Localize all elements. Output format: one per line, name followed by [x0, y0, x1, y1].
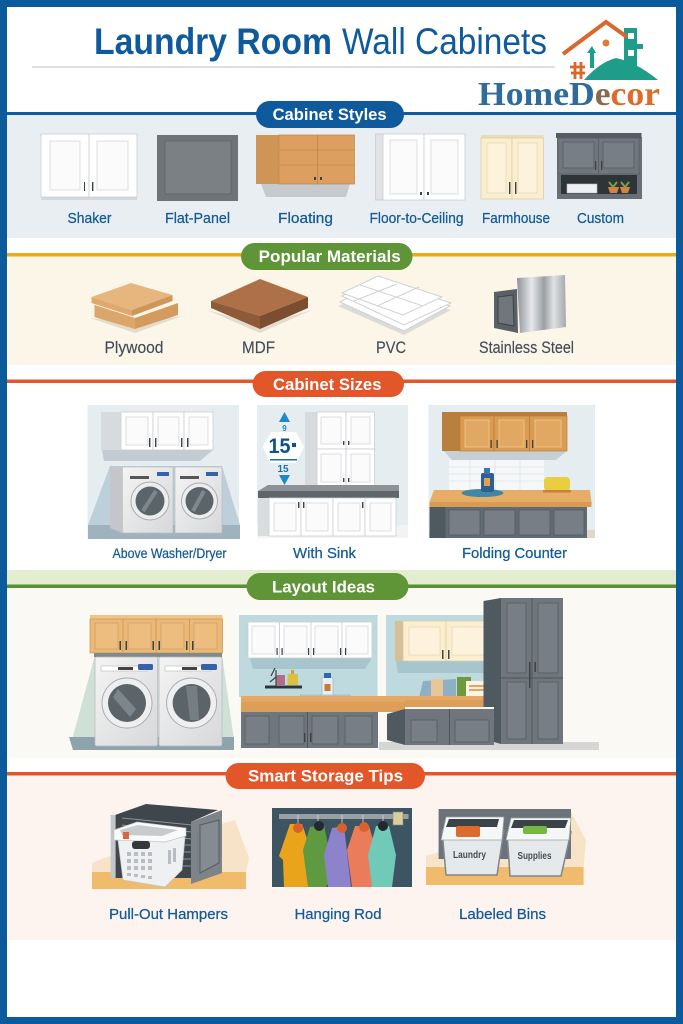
illustration: pull-out hamper: [92, 804, 249, 889]
heading: Cabinet Styles: [256, 101, 404, 128]
illustration: counter and base cabinets: [241, 615, 599, 750]
heading: Popular Materials: Popular Materials: [259, 247, 401, 266]
bin: supplies: Supplies: [518, 851, 552, 862]
labels: style names: Shaker: [68, 210, 112, 227]
labels: material names: Plywood: [104, 338, 164, 357]
illustration: tall cabinet: [484, 598, 563, 744]
panel: cabinet sizes: [7, 371, 676, 562]
logo: HomeDecor: HomeDecor: [478, 76, 660, 113]
icon: house: [563, 22, 658, 80]
callout: size dimension: 9: [282, 424, 287, 433]
labels: size names: With Sink: [293, 545, 356, 562]
cabinet: floating: [256, 135, 354, 197]
panel: smart storage tips: [7, 763, 676, 940]
illustration: sink wall and counter: [239, 615, 378, 702]
labels: material names: [104, 338, 574, 357]
material: PVC: [338, 276, 451, 335]
heading: Layout Ideas: Layout Ideas: [272, 578, 375, 597]
illustration: above washer/dryer: [88, 405, 240, 539]
logo: HomeDecor: [478, 22, 660, 113]
callout: size dimension: 15: [277, 464, 289, 475]
labels: material names: MDF: [242, 338, 275, 357]
illustration: washer and dryer wall: [69, 615, 234, 750]
material: MDF: [207, 279, 312, 333]
appliance: dryer: [159, 657, 222, 746]
illustration: hanging rod: [272, 808, 412, 887]
callout: size dimension: [263, 412, 304, 485]
labels: style names: Custom: [577, 210, 624, 227]
illustration: with sink: [257, 405, 408, 538]
panel: layout ideas: [7, 570, 676, 758]
heading: Cabinet Sizes: [253, 371, 404, 397]
labels: style names: Floor-to-Ceiling: [370, 210, 464, 227]
labels: size names: [112, 545, 567, 562]
labels: style names: Farmhouse: [482, 210, 550, 227]
bin: laundry: Laundry: [453, 850, 486, 861]
heading: Layout Ideas: [246, 573, 408, 600]
title: Wall Cabinets: [342, 21, 547, 62]
heading: Smart Storage Tips: [226, 763, 425, 789]
illustration: labeled bins: [426, 809, 586, 885]
heading: Cabinet Styles: Cabinet Styles: [273, 105, 387, 124]
title: [94, 21, 547, 62]
illustration: folding counter: [428, 405, 595, 538]
appliance: washer: [95, 657, 158, 746]
heading: Popular Materials: [241, 243, 412, 270]
labels: storage tip names: Hanging Rod: [294, 906, 382, 923]
labels: storage tip names: [109, 906, 546, 923]
heading: Smart Storage Tips: Smart Storage Tips: [248, 767, 403, 786]
cabinet: flat-panel: [157, 135, 238, 201]
labels: size names: Above Washer/Dryer: [112, 545, 227, 561]
labels: material names: PVC: [376, 338, 406, 357]
panel: cabinet styles: [7, 101, 676, 238]
labels: size names: Folding Counter: [462, 545, 567, 562]
bin: laundry: [441, 817, 504, 875]
heading: Cabinet Sizes: Cabinet Sizes: [273, 375, 382, 394]
cabinet: shaker: [41, 134, 137, 200]
labels: style names: [68, 210, 624, 227]
cabinet: floor-to-ceiling: [376, 134, 465, 200]
labels: storage tip names: Labeled Bins: [459, 906, 546, 923]
material: plywood: [90, 283, 182, 333]
cabinet: custom: [556, 133, 642, 199]
labels: storage tip names: Pull-Out Hampers: [109, 906, 228, 923]
title: Laundry Room: [94, 21, 332, 62]
material: stainless steel: [494, 275, 566, 333]
bin: supplies: [506, 818, 571, 876]
cabinet: farmhouse: [481, 135, 544, 199]
callout: size dimension: 15: [268, 435, 291, 458]
labels: style names: Floating: [278, 210, 333, 227]
labels: style names: Flat-Panel: [165, 210, 230, 227]
labels: material names: Stainless Steel: [479, 338, 574, 357]
panel: popular materials: [7, 243, 676, 365]
